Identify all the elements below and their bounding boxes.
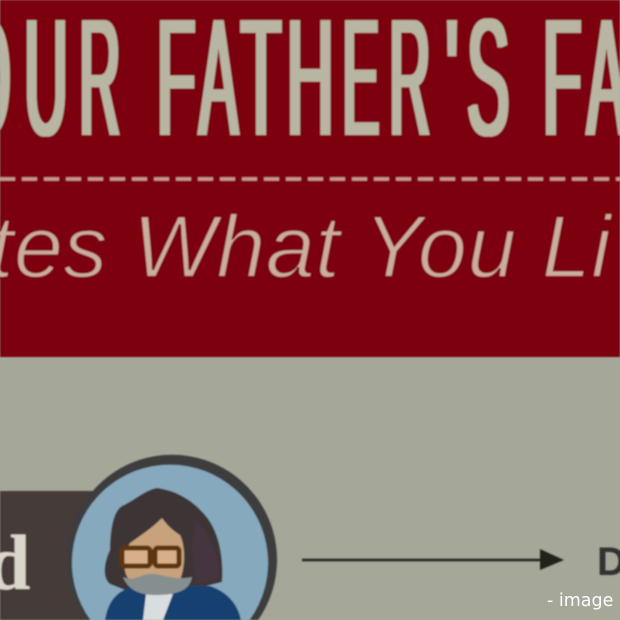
arrow (302, 549, 564, 570)
panel: red header banner (0, 0, 620, 357)
jacket (105, 586, 241, 620)
subtitle: tes What You Li (0, 197, 613, 296)
title (0, 0, 620, 171)
label box (0, 491, 100, 620)
icon: portrait of bearded man (67, 455, 277, 620)
caption: - image (547, 591, 613, 611)
hair shadow (193, 522, 219, 583)
face (124, 518, 184, 589)
shirt (143, 594, 173, 620)
hair (105, 488, 222, 590)
beard (123, 574, 192, 595)
divider: dashed line (0, 177, 620, 181)
glasses (122, 548, 179, 566)
panel: lower row (0, 455, 620, 620)
